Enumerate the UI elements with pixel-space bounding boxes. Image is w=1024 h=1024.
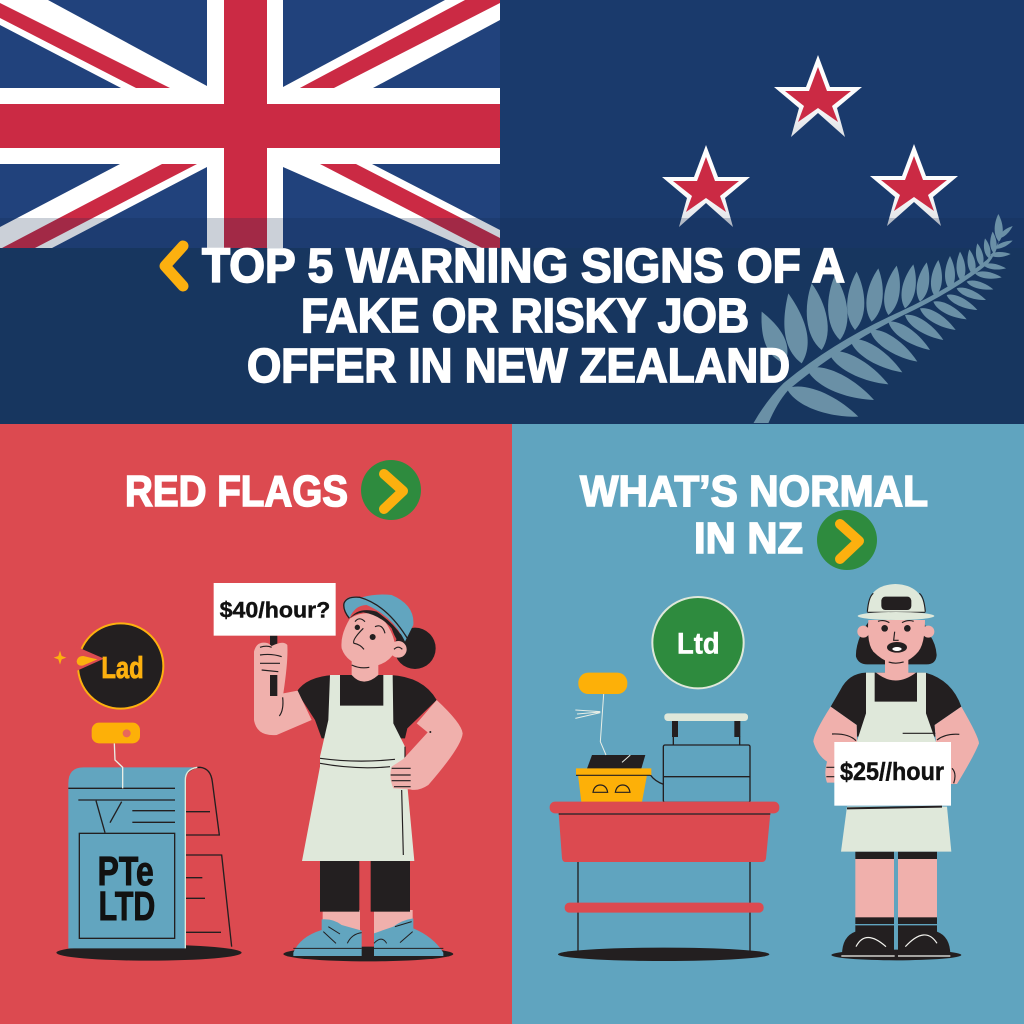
icon: top star xyxy=(774,55,862,137)
illustration: red panel scene xyxy=(54,583,463,961)
icon: green chevron badge xyxy=(361,460,421,520)
title: FAKE OR RISKY JOB xyxy=(301,290,749,343)
badge: Ltd xyxy=(652,597,744,688)
person holding sign xyxy=(254,595,463,961)
sign: $25//hour xyxy=(834,742,951,808)
icon: left star xyxy=(662,145,750,227)
heading: what's normal in NZ: WHAT’S NORMAL xyxy=(580,467,928,516)
badge: Ltd: Ltd xyxy=(677,627,720,660)
heading: what's normal in NZ xyxy=(580,467,928,563)
tag with wire xyxy=(92,723,140,788)
title xyxy=(202,240,845,393)
sign: $25//hour: $25//hour xyxy=(840,758,944,786)
sign: $40/hour?: $40/hour? xyxy=(220,598,330,623)
illustration: blue panel scene xyxy=(550,584,979,961)
icon: right star xyxy=(870,144,958,226)
title band overlay xyxy=(0,218,1024,424)
heading: red flags: RED FLAGS xyxy=(125,467,348,516)
icon: silver fern xyxy=(753,214,1014,426)
header background xyxy=(0,0,1024,424)
counter with register xyxy=(550,713,779,961)
person holding sign xyxy=(813,584,979,960)
badge: Lad: Lad xyxy=(101,651,144,685)
flag: union jack canton xyxy=(0,0,500,248)
sign: $40/hour? xyxy=(214,583,336,636)
contract document: LTD xyxy=(99,883,155,929)
badge: Lad xyxy=(54,623,163,709)
heading: what's normal in NZ: IN NZ xyxy=(694,514,803,563)
icon: green chevron badge xyxy=(817,510,877,570)
contract document xyxy=(56,767,242,961)
title: TOP 5 WARNING SIGNS OF A xyxy=(202,240,845,293)
panel: what's normal xyxy=(512,424,1024,1024)
panel: red flags xyxy=(0,424,512,1024)
icon: title chevron xyxy=(165,246,183,286)
title: OFFER IN NEW ZEALAND xyxy=(247,340,790,393)
contract document: PTe xyxy=(98,848,154,894)
tag with wire xyxy=(575,673,627,755)
